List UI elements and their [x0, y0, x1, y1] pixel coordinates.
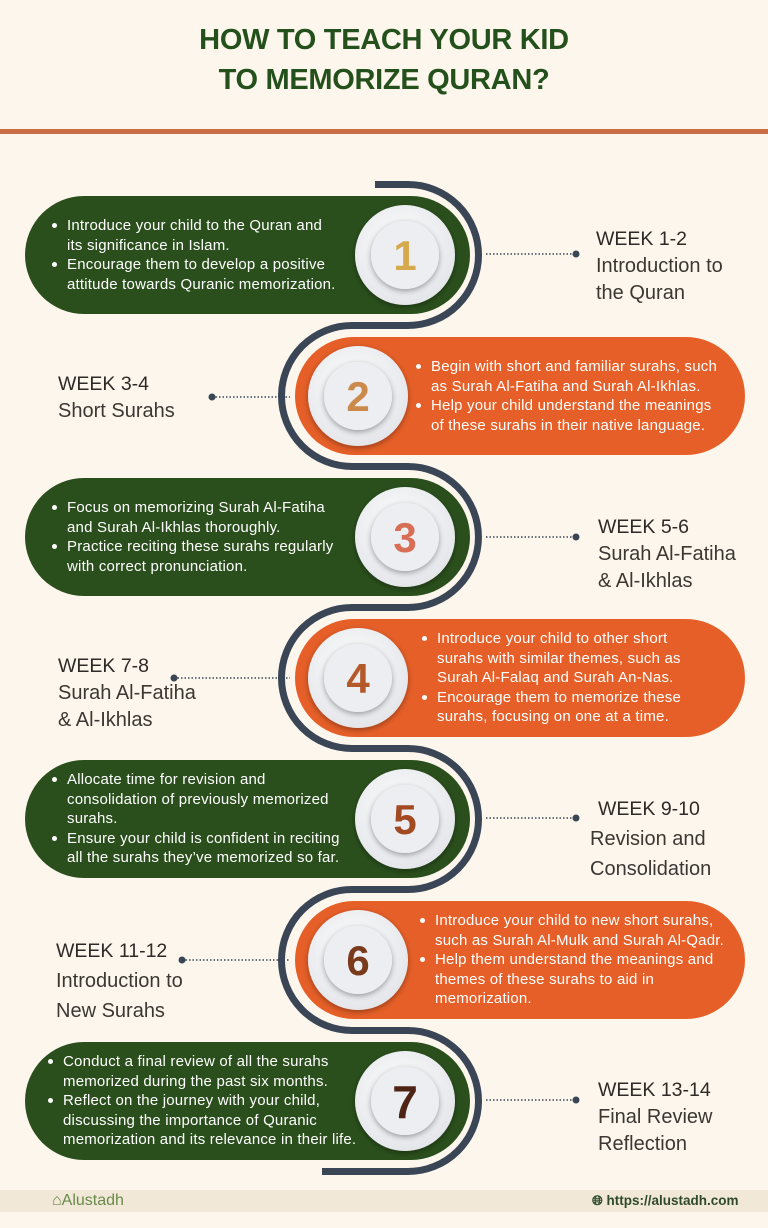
step 1 label: WEEK 1-2: [596, 228, 687, 250]
step 7 text: memorized during the past six months.: [63, 1073, 328, 1090]
step 3 label: WEEK 5-6: [598, 516, 689, 538]
number discs: [308, 205, 455, 1151]
number discs: 4: [346, 655, 370, 702]
step 2 label: WEEK 3-4: [58, 373, 149, 395]
footer: [0, 1190, 768, 1212]
step 6 label: WEEK 11-12: [56, 940, 167, 962]
title: [199, 24, 569, 96]
step 4 label: & Al-Ikhlas: [58, 709, 152, 731]
step 6 text: such as Surah Al-Mulk and Surah Al-Qadr.: [435, 932, 724, 949]
number discs: 5: [393, 796, 417, 843]
step 3 text: [52, 499, 334, 574]
step 5 label: WEEK 9-10: [598, 798, 700, 820]
step 4 label: Surah Al-Fatiha: [58, 682, 196, 704]
serpentine line: [281, 184, 478, 1172]
website: 🌐︎ https://alustadh.com: [592, 1193, 739, 1208]
step 4 text: surahs with similar themes, such as: [437, 650, 681, 667]
step 1 text: attitude towards Quranic memorization.: [67, 276, 336, 292]
step 5 label: [590, 798, 711, 880]
step 5 text: Allocate time for revision and: [67, 771, 266, 788]
step 6 label: [56, 940, 183, 1022]
brand: ⌂Alustadh: [52, 1192, 124, 1209]
step 3 label: [598, 516, 736, 592]
step 5 text: consolidation of previously memorized: [67, 791, 329, 808]
step 2 text: [416, 358, 717, 434]
step 5 label: Consolidation: [590, 858, 711, 880]
number discs: 1: [393, 232, 417, 279]
step 3 text: Practice reciting these surahs regularly: [67, 538, 333, 555]
title: HOW TO TEACH YOUR KID: [199, 24, 569, 56]
step 3 label: & Al-Ikhlas: [598, 570, 692, 592]
step 4 text: surahs, focusing on one at a time.: [437, 708, 669, 725]
step 4 text: Surah Al-Falaq and Surah An-Nas.: [437, 669, 674, 686]
number discs: 3: [393, 514, 417, 561]
number discs: 2: [346, 373, 370, 420]
step 7 text: [48, 1053, 356, 1148]
step 4 label: WEEK 7-8: [58, 655, 149, 677]
number discs: 6: [346, 937, 370, 984]
step 6 text: Help them understand the meanings and: [435, 951, 713, 968]
step 7 label: [598, 1079, 712, 1155]
step 7 label: Reflection: [598, 1133, 687, 1155]
step 5 text: Ensure your child is confident in reciting: [67, 830, 340, 847]
step 4 label: [58, 655, 196, 731]
step 3 label: Surah Al-Fatiha: [598, 543, 736, 565]
step 2 label: Short Surahs: [58, 400, 175, 422]
step 6 label: New Surahs: [56, 1000, 165, 1022]
step 2 text: Begin with short and familiar surahs, such: [431, 358, 717, 375]
step 1 text: its significance in Islam.: [67, 236, 230, 254]
step 7 label: Final Review: [598, 1106, 712, 1128]
step 1 label: [596, 228, 723, 304]
step 7 text: Reflect on the journey with your child,: [63, 1092, 320, 1109]
step 1 text: [52, 217, 336, 292]
step 1 label: Introduction to: [596, 255, 723, 277]
step 3 text: with correct pronunciation.: [67, 558, 248, 574]
step 4 text: [422, 630, 681, 725]
step 7 text: memorization and its relevance in their life.: [63, 1131, 356, 1148]
pills: [25, 196, 745, 1160]
step 7 text: discussing the importance of Quranic: [63, 1112, 317, 1129]
orange rule: [0, 129, 768, 134]
step 2 text: Help your child understand the meanings: [431, 397, 711, 414]
step 7 label: WEEK 13-14: [598, 1079, 711, 1101]
step 2 text: as Surah Al-Fatiha and Surah Al-Ikhlas.: [431, 378, 701, 394]
step 2 text: of these surahs in their native language.: [431, 416, 705, 434]
title: TO MEMORIZE QURAN?: [219, 64, 549, 96]
step 7 text: Conduct a final review of all the surahs: [63, 1053, 329, 1070]
step 6 text: themes of these surahs to aid in: [435, 971, 654, 988]
step 1 text: Encourage them to develop a positive: [67, 256, 325, 273]
step 6 label: Introduction to: [56, 970, 183, 992]
step 4 text: Introduce your child to other short: [437, 630, 667, 647]
step 5 text: surahs.: [67, 810, 118, 827]
step 5 label: Revision and: [590, 828, 706, 850]
connectors: [170, 250, 580, 1104]
step 6 text: memorization.: [435, 990, 532, 1007]
step 3 text: Focus on memorizing Surah Al-Fatiha: [67, 499, 325, 516]
step 3 text: and Surah Al-Ikhlas thoroughly.: [67, 518, 281, 536]
step 5 text: all the surahs they’ve memorized so far.: [67, 849, 339, 866]
step 1 label: the Quran: [596, 282, 685, 304]
step 4 text: Encourage them to memorize these: [437, 689, 681, 706]
step 1 text: Introduce your child to the Quran and: [67, 217, 322, 234]
number discs: 7: [392, 1076, 418, 1128]
step 6 text: [420, 912, 724, 1007]
step 6 text: Introduce your child to new short surahs,: [435, 912, 713, 929]
step 2 label: [58, 373, 175, 422]
step 5 text: [52, 771, 340, 866]
